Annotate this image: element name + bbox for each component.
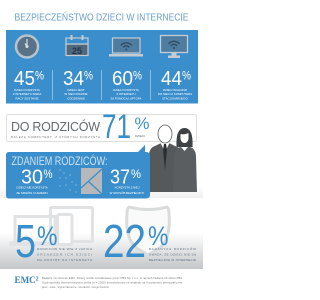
heading: zdaniem rodziców: ZDANIEM RODZICÓW: [12, 155, 108, 168]
footnote: płeć, wiek, wykształcenie, wielkość miejscowości. [42, 285, 110, 289]
stat: 30%: % [44, 167, 53, 181]
bottom grey gradient band [0, 233, 203, 269]
stat: 44%: % [182, 68, 191, 82]
stat: 37%: % [131, 167, 141, 181]
caption: 22% text: BEZPIECZNE W INTERNECIE [149, 258, 196, 262]
caption: 5% text: RODZICÓW NIE WIE Z JAKICH [37, 246, 92, 251]
panel: parents card [6, 108, 196, 146]
woman [173, 128, 197, 192]
caption: 5% text: MA DOSTĘP DO INTERNETU [37, 258, 92, 262]
caption: 22% text: UWAŻA, ŻE DZIECI NIE SĄ [149, 252, 197, 256]
icon: laptop [109, 38, 143, 56]
footnote: Ogólnopolska reprezentatywna próba (n = 1000) dorosłościowo ze względu na 4 parametry demograficzne: [42, 280, 183, 284]
caption: 22% text: BADANYCH RODZICÓW [149, 246, 196, 251]
heading: do rodziców: DO RODZICÓW [11, 119, 100, 134]
icon: calendar: 25 [72, 46, 82, 56]
stat: 22%: % [148, 221, 168, 251]
caption: computers: NALEŻĄ KOMPUTERY, Z KTÓRYCH KORZYSTA [11, 134, 100, 139]
stat: 37% [110, 166, 144, 195]
stat: 34%: DZIECI JEST [67, 88, 85, 92]
icon: desktop monitor [160, 36, 188, 58]
stat: 5% [15, 215, 58, 267]
stat: 37%: 37 [110, 166, 130, 188]
stat: 60% [110, 68, 142, 100]
stat: 22%: 22 [103, 215, 146, 267]
stat: 30%: DZIECI NIE KORZYSTA [16, 186, 48, 190]
stat: 34%: % [84, 68, 93, 82]
man [149, 125, 179, 192]
stat: 60%: % [133, 68, 142, 82]
icon: calendar [66, 35, 88, 56]
stat: 44%: STACJONARNEGO [162, 96, 189, 100]
stat: 71%: % [134, 114, 150, 133]
stat: 34%: CODZIENNIE [67, 96, 85, 100]
icon: padlock dots [59, 169, 77, 193]
stat: 45%: 45 [14, 68, 35, 90]
illustration: devices [11, 208, 92, 244]
icon: shield [127, 207, 169, 255]
stat: 45%: % [35, 68, 44, 82]
illustration: parents silhouettes [149, 125, 197, 192]
stat: 30%: 30 [21, 166, 43, 188]
stat: 60%: DZIECI KORZYSTA [113, 88, 139, 92]
footnote: Badanie na zlecenie EMC. Polacy środki ośrodkowane przez PBS Sp. z o.o. w ramach badania Omnibus PBS. [42, 276, 183, 280]
icon: clock [16, 36, 38, 58]
stat: 71%: DZIECI [135, 134, 145, 138]
stat: 45%: Z INTERNETU KIEDA [13, 92, 41, 96]
caption: 5% text: URZĄDZEŃ ICH DZIECI [37, 252, 92, 256]
stat: 44% [158, 68, 192, 100]
icon: envelope [81, 168, 102, 194]
stat: 37%: W SPOSÓB BEZPIECZNY [110, 190, 144, 195]
stat: 44%: 44 [161, 68, 182, 90]
stat: 45%: RACY ZOSTANIE [15, 96, 39, 100]
stat: 5%: 5 [15, 215, 36, 267]
stat: 44%: DO SIECI Z KOMPUTERA [158, 92, 192, 96]
stat: 71%: 71 [102, 108, 131, 146]
panel: usage stats [6, 30, 198, 104]
stat: 30%: ZE SMSÓW I KAMERKI [16, 190, 48, 195]
stat: 34%: 34 [63, 68, 84, 90]
stat: 60%: Z INTERNETU [116, 92, 136, 96]
stat: 45%: DZIECI KORZYSTA [14, 88, 40, 92]
logo: EMC: EMC² [14, 276, 39, 286]
stat: 44%: DZIECI WCHODZI [163, 88, 187, 92]
stat: 34% [63, 68, 93, 100]
panel: parents' opinion [6, 145, 150, 198]
mid grey shadow band [0, 186, 203, 198]
stat: 60%: 60 [112, 68, 133, 90]
stat: 37%: KORZYSTA Z NIEJ [115, 186, 140, 190]
stat: 5%: % [37, 221, 58, 251]
stat: 45% [13, 68, 44, 100]
stat: 34%: W SIECI PRAWIE [64, 92, 88, 96]
stat: 60%: ZA POMOCĄ LAPTOPA [110, 96, 142, 100]
stat: 30% [16, 166, 53, 195]
